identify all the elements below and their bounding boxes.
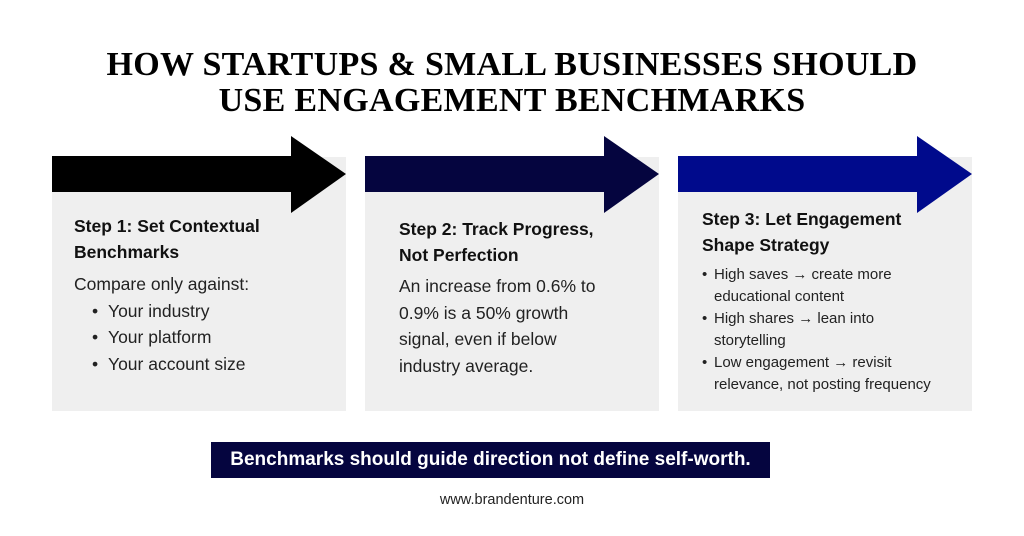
step 1 text <box>74 216 260 374</box>
arrow: step 3 <box>678 136 972 213</box>
callout banner <box>211 442 770 478</box>
step 1 text: Benchmarks <box>74 242 179 262</box>
step 1 text: Compare only against: <box>74 274 249 294</box>
step 1 text: Your platform <box>108 327 211 347</box>
step 3 text: Step 3: Let Engagement <box>702 209 901 229</box>
step 2 text: Step 2: Track Progress, <box>399 219 594 239</box>
step 3 text: High shares → lean into storytelling <box>714 310 874 349</box>
footer url: www.brandenture.com <box>440 492 584 508</box>
step 3 text: Shape Strategy <box>702 235 829 255</box>
title: USE ENGAGEMENT BENCHMARKS <box>219 82 805 119</box>
arrow: step 2 <box>365 136 659 213</box>
title: HOW STARTUPS & SMALL BUSINESSES SHOULD <box>106 46 918 83</box>
step 2 text: Not Perfection <box>399 245 519 265</box>
panel: step 2 <box>365 157 659 411</box>
step 2 text: An increase from 0.6% to <box>399 276 595 296</box>
arrow: step 1 <box>52 136 346 213</box>
panel: step 1 <box>52 157 346 411</box>
step 1 text: Your industry <box>108 300 210 320</box>
step 2 text: industry average. <box>399 356 533 376</box>
panel: step 3 <box>678 157 972 411</box>
title <box>106 46 918 119</box>
step 2 text: 0.9% is a 50% growth <box>399 302 568 322</box>
step 3 text: High saves → create more educational content <box>714 266 892 305</box>
step 2 text <box>399 219 595 376</box>
step 3 text: Low engagement → revisit relevance, not posting frequency <box>714 354 931 393</box>
step 1 text: Your account size <box>108 354 246 374</box>
step 3 text <box>702 209 931 393</box>
step 2 text: signal, even if below <box>399 329 557 349</box>
callout banner: Benchmarks should guide direction not define self-worth. <box>230 449 751 470</box>
step 1 text: Step 1: Set Contextual <box>74 216 260 236</box>
